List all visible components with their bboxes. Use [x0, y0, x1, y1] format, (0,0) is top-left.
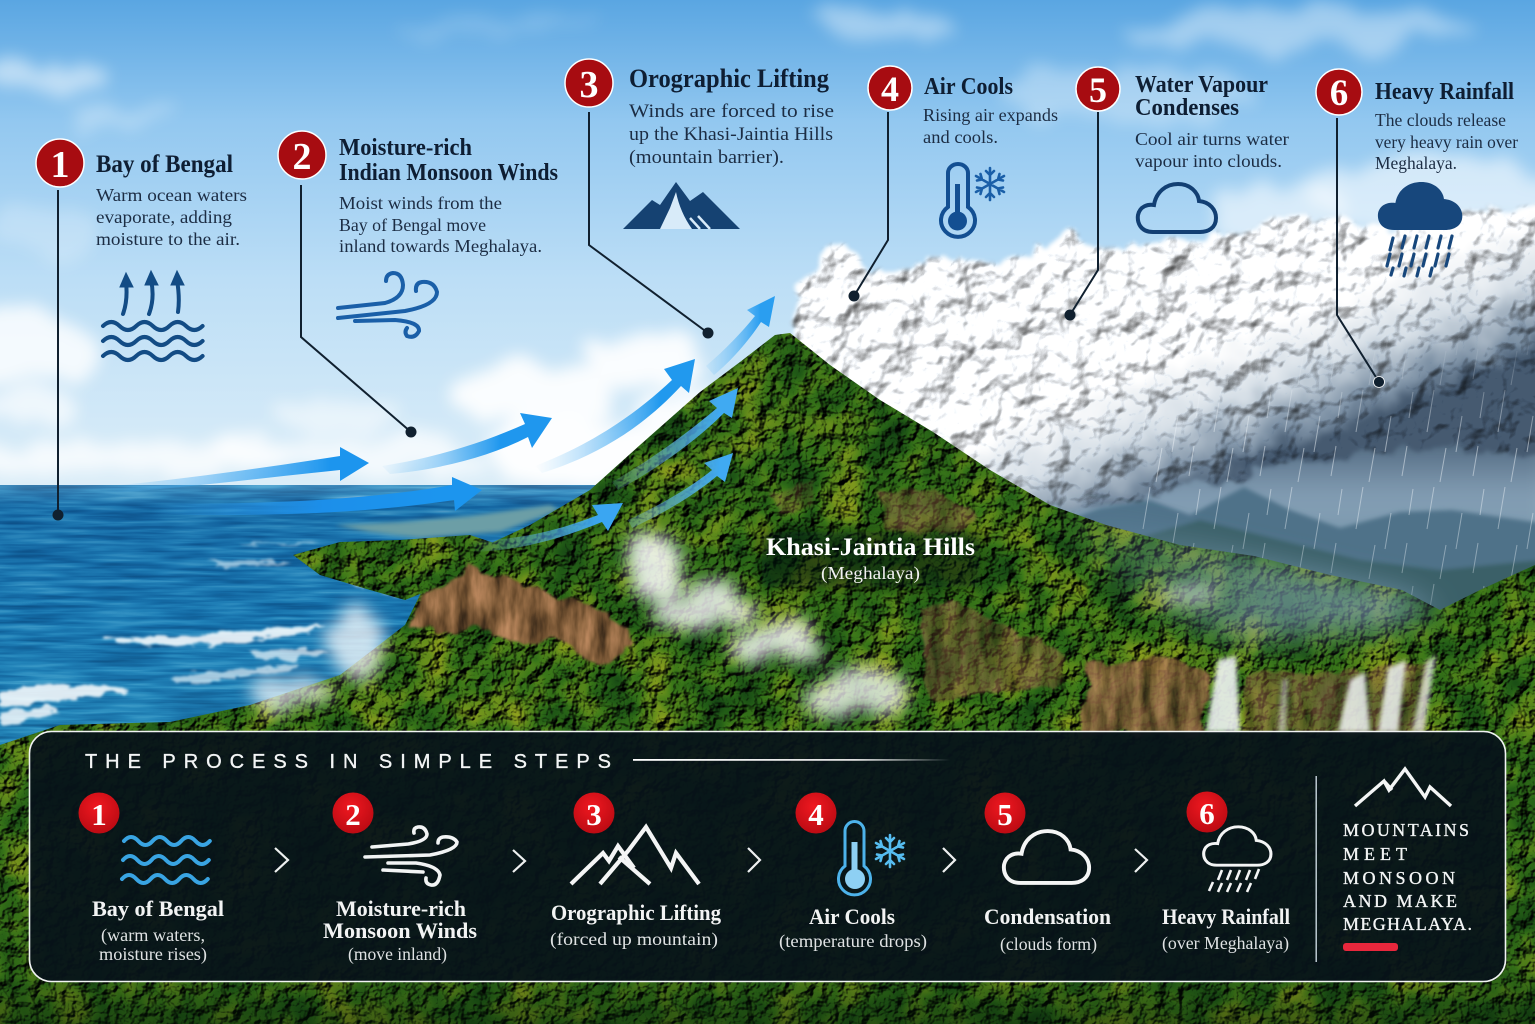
body 5: vapour into clouds. [1135, 151, 1282, 171]
step 1 note [99, 925, 207, 964]
coastal ridge [293, 535, 492, 600]
icon: evaporating water [103, 271, 203, 360]
badge 2 [278, 131, 326, 179]
tagline text [1343, 820, 1472, 934]
body 6: very heavy rain over [1375, 132, 1518, 152]
step 5 icon: cloud [1004, 831, 1089, 883]
arrow: slope upper [612, 388, 738, 490]
step 1 badge: 1 [91, 797, 107, 832]
badge 5 [1076, 67, 1120, 111]
cloud mass [790, 205, 1535, 515]
body 3: Winds are forced to rise [629, 101, 834, 122]
arrow: upper middle [382, 413, 552, 474]
body 4: and cools. [923, 127, 998, 147]
tagline text: MEET [1343, 844, 1407, 864]
arrow: step 3 to 4 [748, 848, 760, 872]
step 3 badge: 3 [586, 797, 602, 832]
step 2 [323, 792, 477, 964]
foam along coast [0, 541, 420, 724]
body 1: Warm ocean waters [96, 185, 247, 205]
mountain forest [0, 330, 1535, 1024]
step 3 icon: mountains [571, 827, 699, 884]
step 4 note: (temperature drops) [779, 931, 927, 951]
callout 2: Monsoon Winds [278, 131, 558, 438]
badge 3 [565, 59, 613, 107]
badge 6 [1316, 69, 1362, 115]
body 1 [96, 185, 247, 249]
sky [0, 0, 1535, 560]
step 1 note: (warm waters, [101, 925, 205, 945]
step 1 badge [78, 792, 120, 834]
body 2 [339, 193, 542, 256]
wind arrows [60, 296, 775, 552]
badge 1 [36, 139, 84, 187]
heading 5: Condenses [1135, 95, 1239, 121]
cliffs [407, 480, 1429, 736]
step 1 note: moisture rises) [99, 944, 207, 964]
callout 6: Heavy Rainfall [1316, 69, 1518, 388]
step 6 note: (over Meghalaya) [1162, 933, 1289, 953]
step 1 title: Bay of Bengal [92, 896, 224, 921]
icon: rain cloud [1378, 182, 1462, 276]
step 6 badge [1186, 792, 1228, 832]
tagline text: MONSOON [1343, 868, 1455, 888]
body 3: up the Khasi-Jaintia Hills [629, 124, 833, 145]
step 1 icon: waves [122, 837, 210, 883]
arrow: step 2 to 3 [513, 850, 525, 872]
heading 6: Heavy Rainfall [1375, 79, 1514, 105]
callout 5: Condensation [1064, 67, 1289, 320]
arrow: over the peak [706, 296, 775, 375]
arrow: step 1 to 2 [275, 848, 288, 872]
badge 2: 2 [292, 136, 312, 178]
icon: cloud outline [1138, 184, 1216, 232]
body 4: Rising air expands [923, 105, 1058, 125]
red accent bar [1343, 943, 1398, 951]
leader line 1 [52, 190, 64, 520]
step 5 note: (clouds form) [1000, 934, 1097, 954]
arrow: ocean upper [60, 447, 369, 497]
step 4 [779, 792, 927, 951]
tagline text: MEGHALAYA. [1343, 914, 1472, 934]
step 6 icon: rain cloud [1204, 827, 1271, 892]
step 3 note: (forced up mountain) [550, 929, 718, 949]
heading 2: Indian Monsoon Winds [339, 160, 558, 186]
body 3: (mountain barrier). [629, 147, 784, 168]
body 2: Moist winds from the [339, 193, 502, 213]
step 2 title [323, 896, 477, 943]
step 4 title: Air Cools [809, 904, 895, 929]
panel: the process in simple steps [30, 732, 1506, 982]
heading 4: Air Cools [924, 74, 1013, 100]
step 2 title: Monsoon Winds [323, 918, 477, 943]
badge 4 [868, 66, 912, 110]
heading 2 [339, 135, 558, 186]
label: Khasi-Jaintia Hills: Khasi-Jaintia Hills [766, 534, 975, 561]
icon: thermometer and snowflake [941, 164, 1004, 237]
step 3 badge [574, 792, 614, 834]
step 6 badge: 6 [1199, 796, 1215, 831]
arrow: slope foot [470, 503, 623, 552]
callout 1: Bay of Bengal [36, 139, 247, 520]
leader line 2 [301, 185, 416, 438]
callout 4: Air Cools [848, 66, 1058, 302]
step 6 title: Heavy Rainfall [1162, 904, 1290, 929]
leader line 6 [1337, 118, 1384, 388]
body 2: inland towards Meghalaya. [339, 236, 542, 256]
step 3 title: Orographic Lifting [551, 900, 721, 925]
body 5: Cool air turns water [1135, 129, 1289, 149]
haze over distant forest [1050, 505, 1440, 640]
mist [250, 531, 1216, 711]
step 2 icon: wind [365, 827, 457, 885]
icon: mountain peak [1355, 769, 1451, 806]
leader line 5 [1064, 112, 1098, 320]
label: Meghalaya: (Meghalaya) [821, 563, 920, 583]
icon: mountains [623, 182, 740, 229]
badge 1: 1 [50, 144, 70, 186]
far coastline [335, 505, 560, 538]
step 4 badge [796, 792, 836, 834]
tagline text: MOUNTAINS [1343, 820, 1469, 840]
body 6: The clouds release [1375, 110, 1506, 130]
step 5 badge [984, 792, 1026, 834]
step 2 note: (move inland) [348, 944, 447, 964]
arrow: step 4 to 5 [943, 848, 955, 872]
body 6: Meghalaya. [1375, 153, 1457, 173]
step 3 [550, 792, 721, 949]
arrow: slope lower [628, 453, 733, 528]
step 2 title: Moisture-rich [336, 896, 466, 921]
arrow: step 5 to 6 [1135, 849, 1147, 872]
body 1: moisture to the air. [96, 229, 240, 249]
heading 2: Moisture-rich [339, 135, 472, 161]
leader line 3 [589, 112, 714, 338]
arrow: ocean lower [100, 477, 482, 515]
step 2 badge: 2 [345, 797, 361, 832]
icon: wind [338, 273, 437, 337]
heading 5 [1135, 72, 1268, 121]
step 2 badge [332, 792, 374, 834]
tagline block [1343, 769, 1472, 951]
tagline text: AND MAKE [1343, 891, 1457, 911]
badge 4: 4 [881, 69, 899, 109]
badge 5: 5 [1089, 70, 1107, 110]
body 1: evaporate, adding [96, 207, 232, 227]
sea [0, 485, 700, 755]
body 6 [1375, 110, 1518, 173]
step 5 badge: 5 [997, 797, 1013, 832]
step 1 [78, 792, 224, 964]
panel heading: THE PROCESS IN SIMPLE STEPS [85, 751, 611, 773]
body 5 [1135, 129, 1289, 171]
badge 6: 6 [1330, 73, 1348, 114]
mountain label [762, 532, 980, 587]
rain streaks [1142, 343, 1534, 606]
callout 3: Orographic Lifting [565, 59, 834, 338]
leader line 4 [848, 112, 888, 302]
arrow: rising to ridge [535, 359, 695, 473]
horizon clouds left [0, 310, 760, 485]
step 4 icon: thermometer and snowflake [839, 822, 904, 895]
body 3 [629, 101, 834, 168]
step 5 [984, 792, 1111, 954]
heading 3: Orographic Lifting [629, 64, 829, 93]
sky wisps [0, 6, 1535, 254]
heading 5: Water Vapour [1135, 72, 1268, 98]
step 4 badge: 4 [808, 797, 824, 832]
body 2: Bay of Bengal move [339, 215, 486, 235]
body 4 [923, 105, 1058, 147]
waterfalls [1206, 655, 1436, 732]
step 6 [1162, 792, 1290, 953]
distant hills right [1040, 487, 1535, 670]
badge 3: 3 [580, 64, 598, 106]
step 5 title: Condensation [984, 904, 1111, 929]
heading 1: Bay of Bengal [96, 151, 233, 178]
storm sky at right [1040, 340, 1535, 640]
